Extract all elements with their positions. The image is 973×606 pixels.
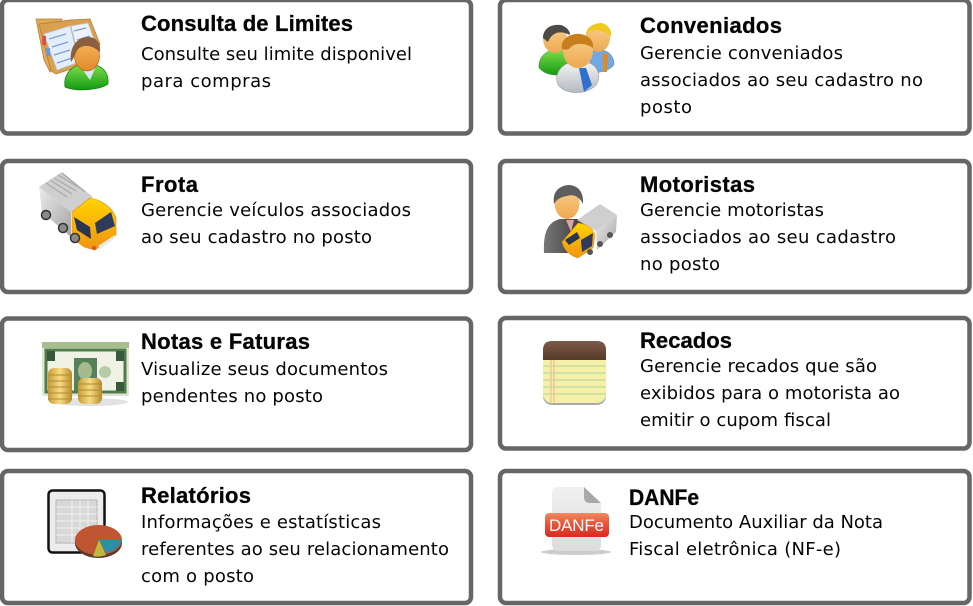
description [640, 200, 896, 275]
description: Gerencie recados que são [640, 356, 877, 377]
description: Gerencie conveniados [640, 43, 843, 64]
icon: banknotes and coins [42, 342, 129, 406]
icon: driver and truck [544, 185, 617, 258]
description: Fiscal eletrônica (NF-e) [629, 539, 841, 560]
title: Notas e Faturas [141, 329, 310, 354]
description: exibidos para o motorista ao [640, 383, 900, 404]
title: Frota [141, 172, 199, 197]
icon: notepad [543, 341, 606, 405]
title: Conveniados [640, 13, 782, 38]
title: DANFe [629, 485, 699, 510]
description: Gerencie veículos associados [141, 200, 411, 221]
description: referentes ao seu relacionamento [141, 539, 449, 560]
description: com o posto [141, 566, 254, 587]
title: Consulta de Limites [141, 11, 353, 36]
title: Motoristas [640, 172, 755, 197]
description: para compras [141, 71, 271, 92]
description: Documento Auxiliar da Nota [629, 512, 883, 533]
title: Recados [640, 328, 732, 353]
description [141, 44, 412, 92]
panel: DANFe [500, 471, 970, 603]
icon: DANFe document: DANFe [549, 516, 604, 535]
description: posto [640, 97, 692, 118]
description: emitir o cupom fiscal [640, 410, 831, 431]
description [640, 43, 923, 118]
description: associados ao seu cadastro no [640, 70, 923, 91]
description [629, 512, 883, 560]
panel: Conveniados [500, 0, 970, 134]
panel: Notas e Faturas [2, 318, 471, 450]
icon: truck [39, 172, 116, 250]
icon: DANFe document [541, 487, 611, 555]
icon: address book with person [36, 19, 108, 90]
description: ao seu cadastro no posto [141, 227, 372, 248]
description: Visualize seus documentos [141, 359, 388, 380]
description [141, 512, 449, 587]
panel: Relatórios [2, 471, 471, 603]
panel: Consulta de Limites [2, 0, 471, 134]
panel: Frota [2, 161, 471, 292]
description [141, 359, 388, 407]
panel: Motoristas [500, 161, 970, 292]
icon: spreadsheet with pie chart [48, 490, 122, 558]
description: Consulte seu limite disponivel [141, 44, 412, 65]
description [141, 200, 411, 248]
icon: group of people [539, 23, 614, 93]
description: Gerencie motoristas [640, 200, 824, 221]
description: pendentes no posto [141, 386, 323, 407]
description: no posto [640, 254, 720, 275]
title: Relatórios [141, 483, 251, 508]
description: Informações e estatísticas [141, 512, 381, 533]
description: associados ao seu cadastro [640, 227, 896, 248]
description [640, 356, 900, 431]
panel: Recados [500, 318, 970, 448]
